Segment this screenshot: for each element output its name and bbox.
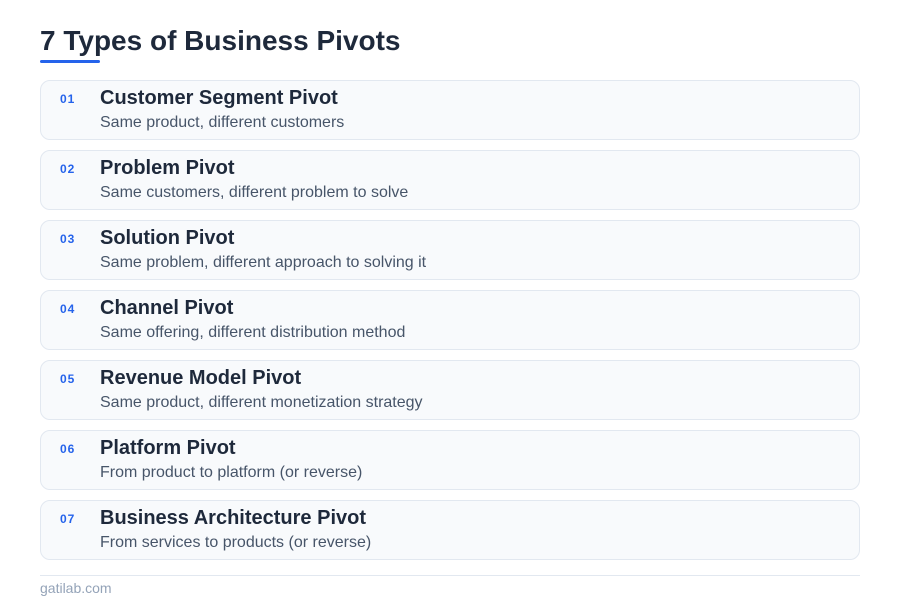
card 05: [40, 360, 860, 420]
card 02: Problem Pivot: [100, 157, 234, 179]
card 05: Revenue Model Pivot: [100, 367, 301, 389]
card 01: 01: [60, 92, 75, 106]
card 01: Customer Segment Pivot: [100, 87, 338, 109]
card 04: Channel Pivot: [100, 297, 233, 319]
card 01: [40, 80, 860, 140]
card 04: 04: [60, 302, 75, 316]
card 06: 06: [60, 442, 75, 456]
card 02: 02: [60, 162, 75, 176]
card 05: 05: [60, 372, 75, 386]
card 07: From services to products (or reverse): [100, 534, 371, 551]
card 01: Same product, different customers: [100, 114, 344, 131]
card 03: 03: [60, 232, 75, 246]
card 06: From product to platform (or reverse): [100, 464, 362, 481]
card 06: Platform Pivot: [100, 437, 236, 459]
card 07: [40, 500, 860, 560]
card 06: [40, 430, 860, 490]
footer: gatilab.com: [40, 580, 112, 596]
card 04: Same offering, different distribution method: [100, 324, 405, 341]
card 02: [40, 150, 860, 210]
card 07: Business Architecture Pivot: [100, 507, 366, 529]
card 03: Same problem, different approach to solving it: [100, 254, 426, 271]
card 04: [40, 290, 860, 350]
card 03: Solution Pivot: [100, 227, 234, 249]
card 03: [40, 220, 860, 280]
card 05: Same product, different monetization strategy: [100, 394, 423, 411]
title: 7 Types of Business Pivots: [40, 25, 400, 56]
card 02: Same customers, different problem to solve: [100, 184, 408, 201]
card 07: 07: [60, 512, 75, 526]
title underline: [40, 60, 100, 63]
